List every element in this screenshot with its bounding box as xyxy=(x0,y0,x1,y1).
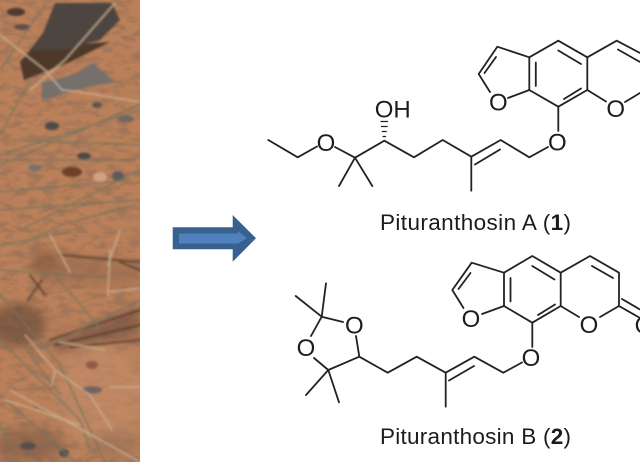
atom labels B: O xyxy=(522,345,540,372)
caption: Pituranthosin B (2): Pituranthosin B (2) xyxy=(380,424,571,449)
side chain A xyxy=(268,140,548,191)
atom labels A: O xyxy=(489,89,508,116)
atom labels A xyxy=(317,89,625,157)
hydroxyl wedge A xyxy=(380,122,388,136)
ring system A xyxy=(479,41,640,131)
atom labels B: O xyxy=(345,312,364,340)
molecule: Pituranthosin B xyxy=(296,256,640,407)
arrow pointing right xyxy=(173,215,256,262)
photo: desert ground with grass and rocks xyxy=(0,0,145,462)
atom labels B: O xyxy=(297,335,315,362)
ring system B xyxy=(452,256,640,347)
atom labels A: O xyxy=(606,96,625,123)
caption: Pituranthosin A (1): Pituranthosin A (1) xyxy=(380,210,571,235)
atom labels B: O xyxy=(462,306,480,333)
atom labels A: OH xyxy=(375,96,411,124)
dioxolane and side chain B xyxy=(296,283,522,407)
molecule: Pituranthosin A xyxy=(268,41,640,191)
atom labels A: O xyxy=(548,129,567,156)
atom labels B: O xyxy=(580,312,598,339)
atom labels A: O xyxy=(317,130,335,157)
atom labels B xyxy=(297,306,640,372)
